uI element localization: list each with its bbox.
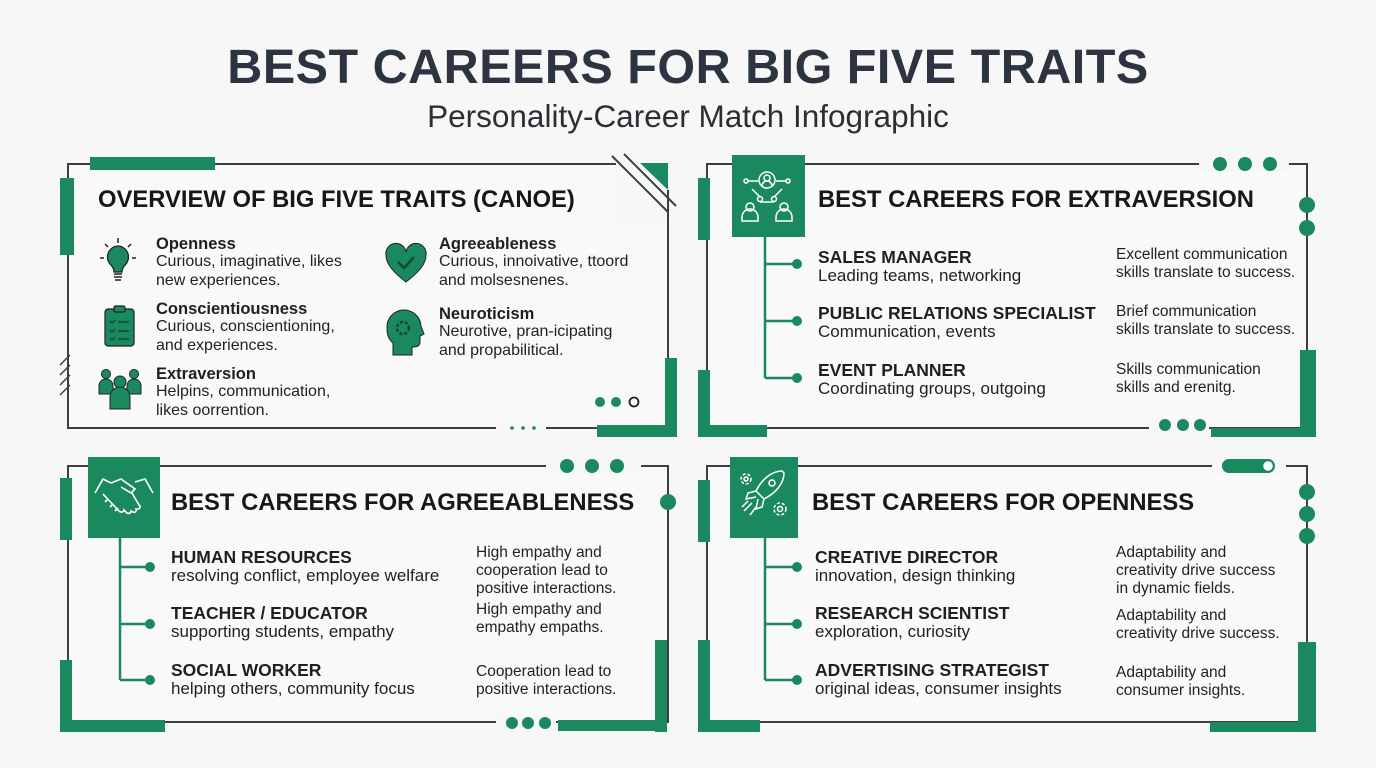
note: event planner: Skills communication <box>1116 361 1261 378</box>
icon: heart check <box>385 242 427 283</box>
text: neuroticism: Neurotive, pran-icipating <box>439 323 612 340</box>
career: public relations specialist <box>818 303 1096 341</box>
career: advertising strategist: original ideas, consumer insights <box>815 679 1062 698</box>
career: human resources: resolving conflict, employee welfare <box>171 566 439 585</box>
note: research scientist: creativity drive success. <box>1116 625 1280 642</box>
career: human resources <box>171 547 439 585</box>
icon: handshake <box>88 457 160 538</box>
career: advertising strategist <box>815 660 1062 698</box>
career: research scientist: RESEARCH SCIENTIST <box>815 603 1009 623</box>
career: social worker: SOCIAL WORKER <box>171 660 321 680</box>
note: teacher: High empathy and <box>476 601 602 618</box>
text: conscientiousness: and experiences. <box>156 336 278 354</box>
career: advertising strategist: ADVERTISING STRATEGIST <box>815 660 1049 680</box>
title: BEST CAREERS FOR BIG FIVE TRAITS <box>227 40 1149 94</box>
note: teacher <box>476 601 604 636</box>
text: extraversion: Extraversion <box>156 365 256 383</box>
icon: people group <box>98 369 142 410</box>
note: human resources: High empathy and <box>476 544 602 561</box>
note: event planner: skills and erenitg. <box>1116 379 1236 396</box>
career: teacher / educator <box>171 603 394 641</box>
career: human resources: HUMAN RESOURCES <box>171 547 352 567</box>
career: teacher / educator: TEACHER / EDUCATOR <box>171 603 368 623</box>
note: advertising strategist: Adaptability and <box>1116 664 1226 681</box>
note: creative director <box>1116 544 1275 597</box>
heading: agreeableness: BEST CAREERS FOR AGREEABLENESS <box>171 489 634 516</box>
icon: head with gear <box>386 310 425 356</box>
note: social worker: positive interactions. <box>476 681 616 698</box>
career: event planner: Coordinating groups, outgoing <box>818 379 1046 398</box>
note: public relations: Brief communication <box>1116 303 1256 320</box>
text: openness: Curious, imaginative, likes <box>156 253 342 270</box>
heading: openness: BEST CAREERS FOR OPENNESS <box>812 489 1194 516</box>
career: public relations specialist: PUBLIC RELATIONS SPECIALIST <box>818 303 1096 323</box>
note: social worker: Cooperation lead to <box>476 663 611 680</box>
panel: best careers for openness <box>698 457 1316 732</box>
heading: overview: OVERVIEW OF BIG FIVE TRAITS (CANOE) <box>98 186 575 213</box>
note: research scientist <box>1116 607 1280 642</box>
career: creative director: CREATIVE DIRECTOR <box>815 547 998 567</box>
career: event planner: EVENT PLANNER <box>818 360 966 380</box>
icon: networking people <box>732 155 805 237</box>
note: creative director: in dynamic fields. <box>1116 580 1235 597</box>
career: event planner <box>818 360 1046 398</box>
note: public relations: skills translate to success. <box>1116 321 1295 338</box>
text: neuroticism <box>439 305 612 358</box>
text: neuroticism: and propabilitical. <box>439 342 564 358</box>
text: openness: Openness <box>156 235 236 253</box>
note: creative director: creativity drive success <box>1116 562 1275 579</box>
icon: clipboard <box>104 305 135 347</box>
text: openness <box>156 235 342 288</box>
career: creative director: innovation, design thinking <box>815 566 1015 585</box>
subtitle: Personality-Career Match Infographic <box>427 98 949 134</box>
text: openness: new experiences. <box>156 272 281 288</box>
text: neuroticism: Neuroticism <box>439 305 534 323</box>
career: social worker <box>171 660 415 698</box>
career: creative director <box>815 547 1015 585</box>
heading: extraversion: BEST CAREERS FOR EXTRAVERSION <box>818 186 1254 213</box>
text: conscientiousness: Curious, conscientioning, <box>156 318 335 335</box>
text: agreeableness: Agreeableness <box>439 235 556 253</box>
note: human resources <box>476 544 616 597</box>
note: event planner <box>1116 361 1261 396</box>
note: human resources: positive interactions. <box>476 580 616 597</box>
icon: rocket with gears <box>730 457 798 538</box>
text: agreeableness <box>439 235 628 288</box>
note: human resources: cooperation lead to <box>476 562 608 579</box>
career: research scientist: exploration, curiosity <box>815 622 970 641</box>
note: teacher: empathy empaths. <box>476 619 604 636</box>
note: social worker <box>476 663 616 698</box>
panel: best careers for extraversion <box>698 155 1316 437</box>
note: sales manager: Excellent communication <box>1116 246 1287 263</box>
icon: lightbulb <box>100 238 136 281</box>
career: teacher / educator: supporting students, empathy <box>171 622 394 641</box>
note: research scientist: Adaptability and <box>1116 607 1226 624</box>
text: extraversion: Helpins, communication, <box>156 383 330 400</box>
panel: overview of big five traits <box>60 153 677 437</box>
career: research scientist <box>815 603 1010 641</box>
note: sales manager <box>1116 246 1295 281</box>
panel: best careers for agreeableness <box>60 457 676 732</box>
career: social worker: helping others, community focus <box>171 679 415 698</box>
note: creative director: Adaptability and <box>1116 544 1226 561</box>
text: conscientiousness: Conscientiousness <box>156 300 307 318</box>
text: agreeableness: and molsesnenes. <box>439 272 569 288</box>
career: public relations specialist: Communication, events <box>818 322 996 341</box>
text: conscientiousness <box>156 300 335 354</box>
note: public relations <box>1116 303 1295 338</box>
career: sales manager: SALES MANAGER <box>818 247 972 267</box>
note: sales manager: skills translate to success. <box>1116 264 1295 281</box>
text: extraversion <box>156 365 330 418</box>
note: advertising strategist: consumer insights. <box>1116 682 1245 699</box>
text: extraversion: likes oorrention. <box>156 402 269 418</box>
note: advertising strategist <box>1116 664 1245 699</box>
career: sales manager: Leading teams, networking <box>818 266 1021 285</box>
career: sales manager <box>818 247 1021 285</box>
text: agreeableness: Curious, innoivative, ttoord <box>439 253 628 270</box>
